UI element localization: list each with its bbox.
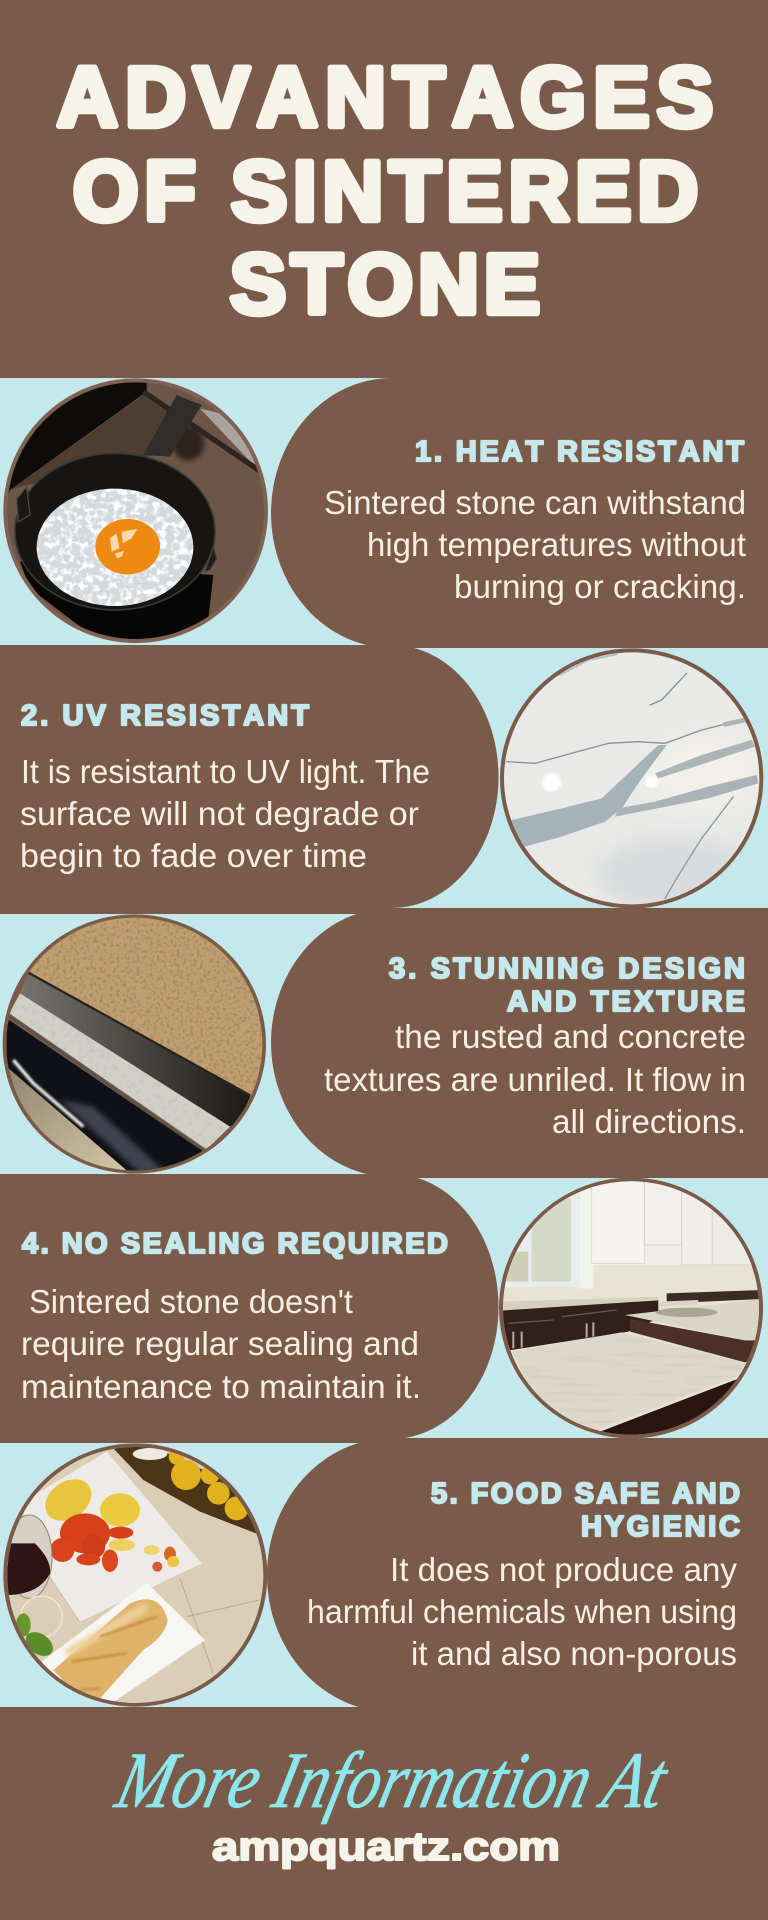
heading: HYGIENIC — [581, 1511, 740, 1543]
body text: It is resistant to UV light. The — [21, 753, 430, 790]
body text: all directions. — [552, 1103, 746, 1140]
title: OF SINTERED — [73, 144, 698, 238]
body text: Sintered stone doesn't — [29, 1283, 353, 1320]
body text: begin to fade over time — [20, 837, 367, 874]
panel: food safe and hygienic — [0, 1438, 768, 1712]
heading: 5. FOOD SAFE AND — [431, 1478, 740, 1510]
body text — [20, 753, 430, 874]
text pill — [267, 1438, 768, 1712]
panel: uv resistant — [0, 645, 768, 913]
heading: 3. STUNNING DESIGN — [389, 953, 745, 985]
panel: no sealing required — [0, 1174, 768, 1445]
body text: require regular sealing and — [21, 1325, 419, 1362]
body text: maintenance to maintain it. — [21, 1368, 421, 1405]
body text: textures are unriled. It flow in — [324, 1061, 746, 1098]
body text: it and also non-porous — [411, 1635, 737, 1672]
body text: high temperatures without — [367, 526, 746, 563]
body text: Sintered stone can withstand — [324, 484, 746, 521]
heading: 4. NO SEALING REQUIRED — [22, 1228, 448, 1260]
panel: stunning design and texture — [0, 908, 768, 1177]
photo: stone slab layers — [0, 910, 275, 1174]
footer: website: ampquartz.com — [212, 1825, 560, 1869]
heading — [431, 1478, 740, 1543]
photo: marble surface — [495, 645, 768, 913]
body text: harmful chemicals when using — [307, 1593, 737, 1630]
heading — [389, 953, 745, 1018]
title: ADVANTAGES — [57, 50, 713, 144]
photo: kitchen countertop — [495, 1175, 768, 1445]
body text — [324, 484, 746, 605]
title — [57, 50, 713, 331]
body text — [21, 1283, 421, 1405]
body text: the rusted and concrete — [395, 1018, 746, 1055]
body text: It does not produce any — [390, 1551, 738, 1588]
body text — [324, 1018, 746, 1140]
heading: AND TEXTURE — [507, 986, 745, 1018]
text pill — [271, 378, 768, 648]
text pill — [271, 908, 768, 1177]
photo: food on worktop — [0, 1440, 275, 1710]
body text: burning or cracking. — [454, 568, 746, 605]
body text: surface will not degrade or — [20, 795, 419, 832]
heading: 1. HEAT RESISTANT — [415, 436, 744, 468]
body text — [307, 1551, 738, 1672]
title: STONE — [230, 237, 540, 331]
panel: heat resistant — [0, 375, 768, 650]
text pill — [0, 645, 498, 908]
text pill — [0, 1174, 498, 1439]
photo: egg in cast iron pan — [0, 375, 275, 650]
heading: 2. UV RESISTANT — [21, 700, 309, 732]
